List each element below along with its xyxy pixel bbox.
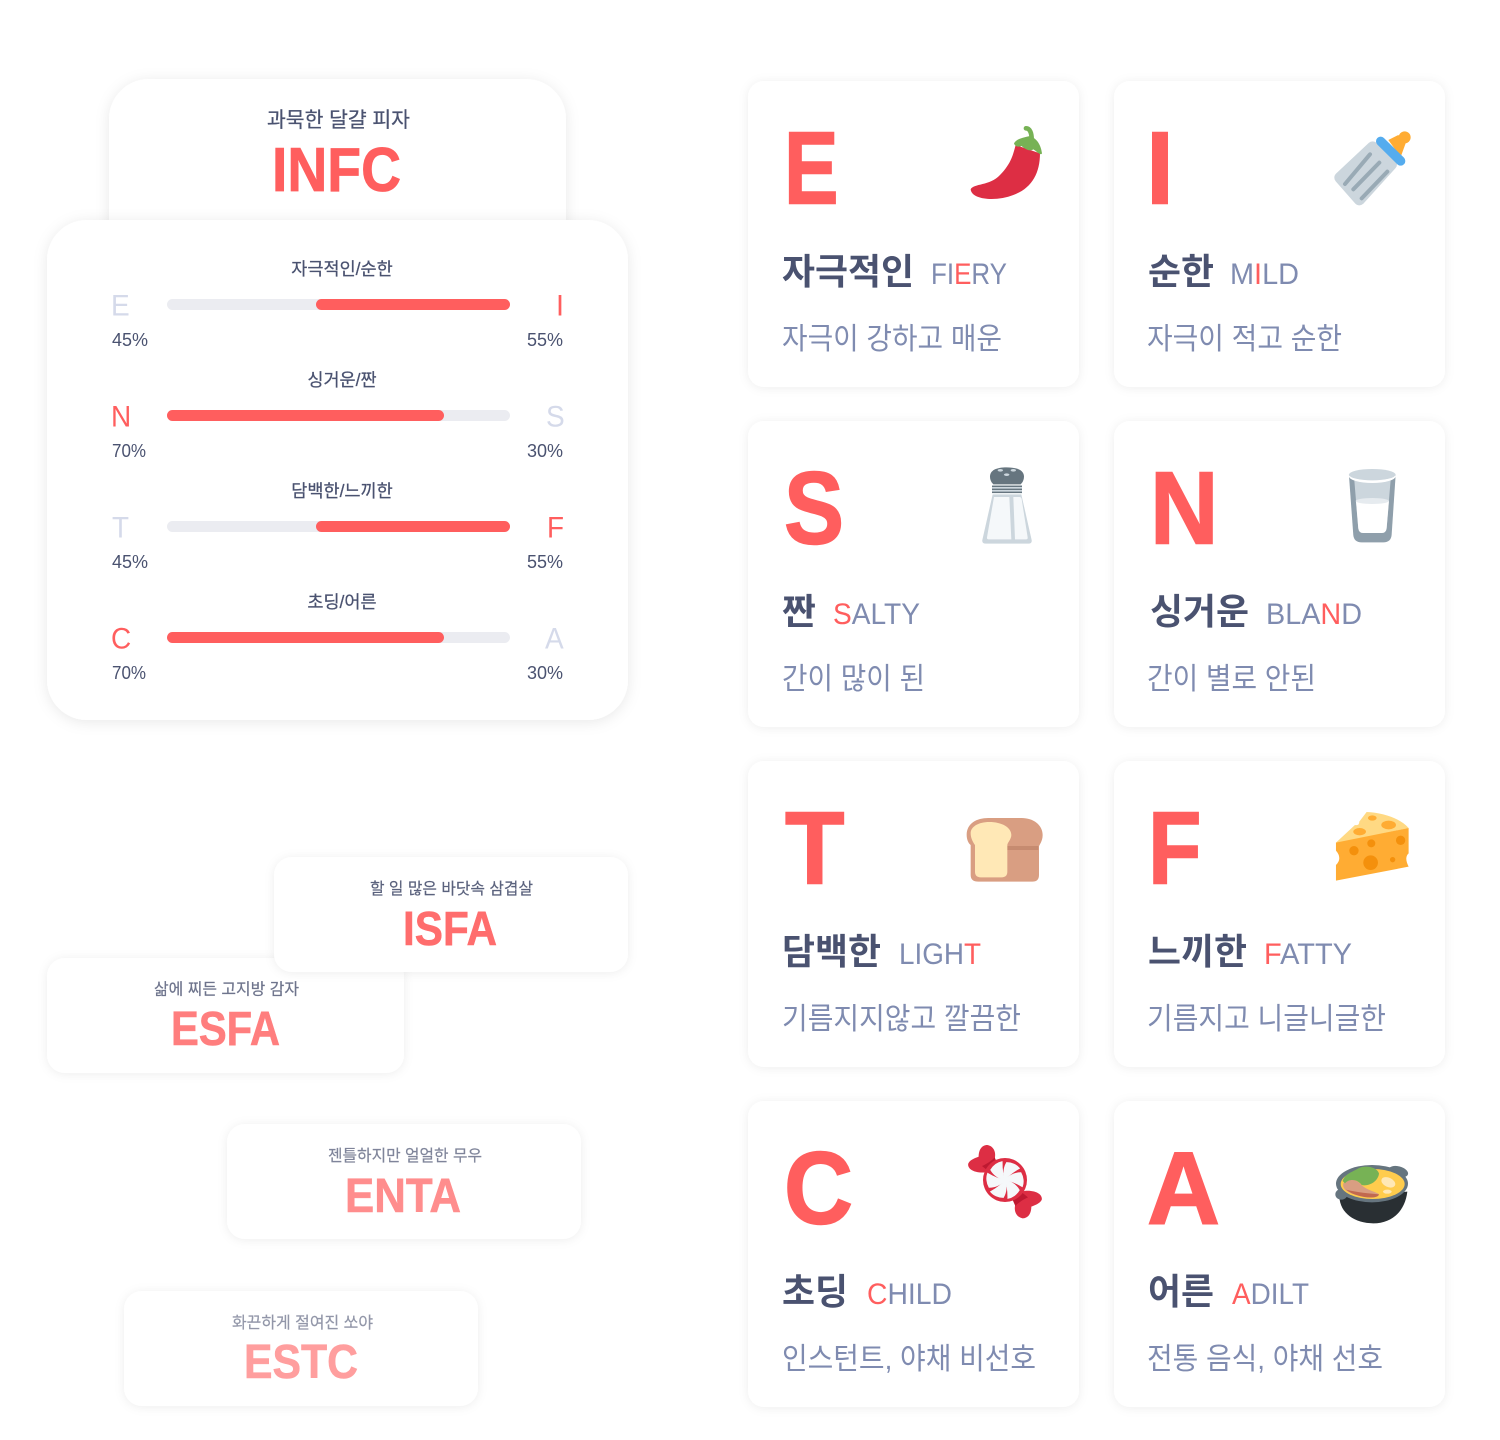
panel: F fatty: 기름지고 니글니글한 xyxy=(1147,1003,1386,1036)
icon: chili pepper xyxy=(971,128,1042,199)
score row: fiery vs mild: 45% xyxy=(112,330,148,350)
score row: child vs adult: 30% xyxy=(527,663,563,683)
icon: salt shaker xyxy=(982,467,1032,544)
score row: light vs fatty: T xyxy=(112,512,129,544)
panel: C child: 초딩 xyxy=(782,1271,848,1312)
panel: I mild: 자극이 적고 순한 xyxy=(1147,323,1342,356)
panel: T light: 담백한 xyxy=(782,931,881,972)
icon: cheese wedge xyxy=(1336,812,1409,881)
panel: INFC result card xyxy=(109,79,566,339)
score row: fiery vs mild: E xyxy=(111,290,130,322)
panel: C child: 인스턴트, 야채 비선호 xyxy=(782,1343,1036,1376)
panel: E fiery: 자극이 강하고 매운 xyxy=(782,323,1002,356)
panel: F fatty: 느끼한 xyxy=(1148,931,1247,972)
icon: stew bowl xyxy=(1335,1164,1409,1223)
score row: fiery vs mild: I xyxy=(556,290,564,322)
score row: bland vs salty: 70% xyxy=(112,441,146,461)
icon: glass of milk xyxy=(1349,469,1396,542)
heading: INFC: INFC xyxy=(272,136,401,205)
card: ESTC xyxy=(124,1291,478,1406)
panel: C child: CHILD xyxy=(867,1278,952,1311)
panel: S salty: SALTY xyxy=(833,598,920,631)
score row: bland vs salty: S xyxy=(546,400,565,434)
score row: bland vs salty: 싱거운/짠 xyxy=(307,370,377,390)
panel: F fatty xyxy=(1114,761,1445,1067)
icon: bread xyxy=(967,818,1043,882)
card: ESFA xyxy=(47,958,404,1073)
panel: N bland: N xyxy=(1150,450,1218,566)
panel: I mild: MILD xyxy=(1230,258,1299,291)
score row: light vs fatty: 담백한/느끼한 xyxy=(291,481,393,501)
icon: baby bottle xyxy=(1340,131,1411,200)
score row: light vs fatty xyxy=(112,481,564,572)
score row: child vs adult: C xyxy=(111,622,131,656)
panel: E fiery: 자극적인 xyxy=(782,251,914,292)
panel: I mild: 순한 xyxy=(1148,251,1214,292)
score row: bland vs salty: N xyxy=(111,400,131,434)
panel: T light: T xyxy=(785,790,844,906)
score row: child vs adult: 70% xyxy=(112,663,146,683)
panel: A adult xyxy=(1114,1101,1445,1407)
card: ENTA: 젠틀하지만 얼얼한 무우 xyxy=(328,1147,482,1165)
panel: N bland: 간이 별로 안된 xyxy=(1147,663,1316,696)
panel: I mild: I xyxy=(1146,110,1174,226)
panel: F fatty: FATTY xyxy=(1264,938,1352,971)
card: ESFA: ESFA xyxy=(171,1003,280,1056)
card: ISFA: 할 일 많은 바닷속 삼겹살 xyxy=(370,880,533,898)
panel: S salty: S xyxy=(784,450,844,566)
panel: A adult: ADILT xyxy=(1232,1278,1309,1311)
card: ISFA xyxy=(274,857,628,972)
panel: A adult: A xyxy=(1147,1130,1220,1246)
card: ESTC: ESTC xyxy=(244,1336,358,1389)
score row: child vs adult: A xyxy=(545,622,564,656)
card: ENTA: ENTA xyxy=(345,1170,461,1223)
score row: fiery vs mild xyxy=(111,259,564,350)
panel: N bland xyxy=(1114,421,1445,727)
panel: T light xyxy=(748,761,1079,1067)
panel: E fiery xyxy=(748,81,1079,387)
card: ESTC: 화끈하게 절여진 쏘야 xyxy=(232,1314,373,1332)
panel: E fiery: E xyxy=(784,110,838,226)
panel: A adult: 어른 xyxy=(1148,1271,1214,1312)
panel: I mild xyxy=(1114,81,1445,387)
panel: C child: C xyxy=(784,1130,853,1246)
score row: fiery vs mild: 자극적인/순한 xyxy=(291,259,393,279)
panel: E fiery: FIERY xyxy=(931,258,1007,291)
panel: S salty: 짠 xyxy=(782,591,816,632)
panel: F fatty: F xyxy=(1148,790,1202,906)
card: ISFA: ISFA xyxy=(403,903,497,956)
score row: light vs fatty: 45% xyxy=(112,552,148,572)
score row: light vs fatty: 55% xyxy=(527,552,563,572)
panel: T light: LIGHT xyxy=(899,938,981,971)
panel: S salty xyxy=(748,421,1079,727)
panel: T light: 기름지지않고 깔끔한 xyxy=(782,1003,1021,1036)
card: ENTA xyxy=(227,1124,581,1239)
score row: bland vs salty: 30% xyxy=(527,441,563,461)
panel: C child xyxy=(748,1101,1079,1407)
score row: child vs adult xyxy=(111,592,564,683)
text: INFC name: 과묵한 달걀 피자 xyxy=(267,109,410,132)
panel: INFC taste scores xyxy=(47,220,628,720)
score row: child vs adult: 초딩/어른 xyxy=(307,592,377,612)
score row: light vs fatty: F xyxy=(547,512,564,544)
panel: S salty: 간이 많이 된 xyxy=(782,663,925,696)
panel: N bland: BLAND xyxy=(1266,598,1362,631)
icon: candy xyxy=(968,1145,1042,1218)
card: ESFA: 삶에 찌든 고지방 감자 xyxy=(154,980,299,998)
panel: A adult: 전통 음식, 야채 선호 xyxy=(1147,1343,1383,1376)
score row: bland vs salty xyxy=(111,370,565,461)
panel: N bland: 싱거운 xyxy=(1150,591,1249,632)
score row: fiery vs mild: 55% xyxy=(527,330,563,350)
